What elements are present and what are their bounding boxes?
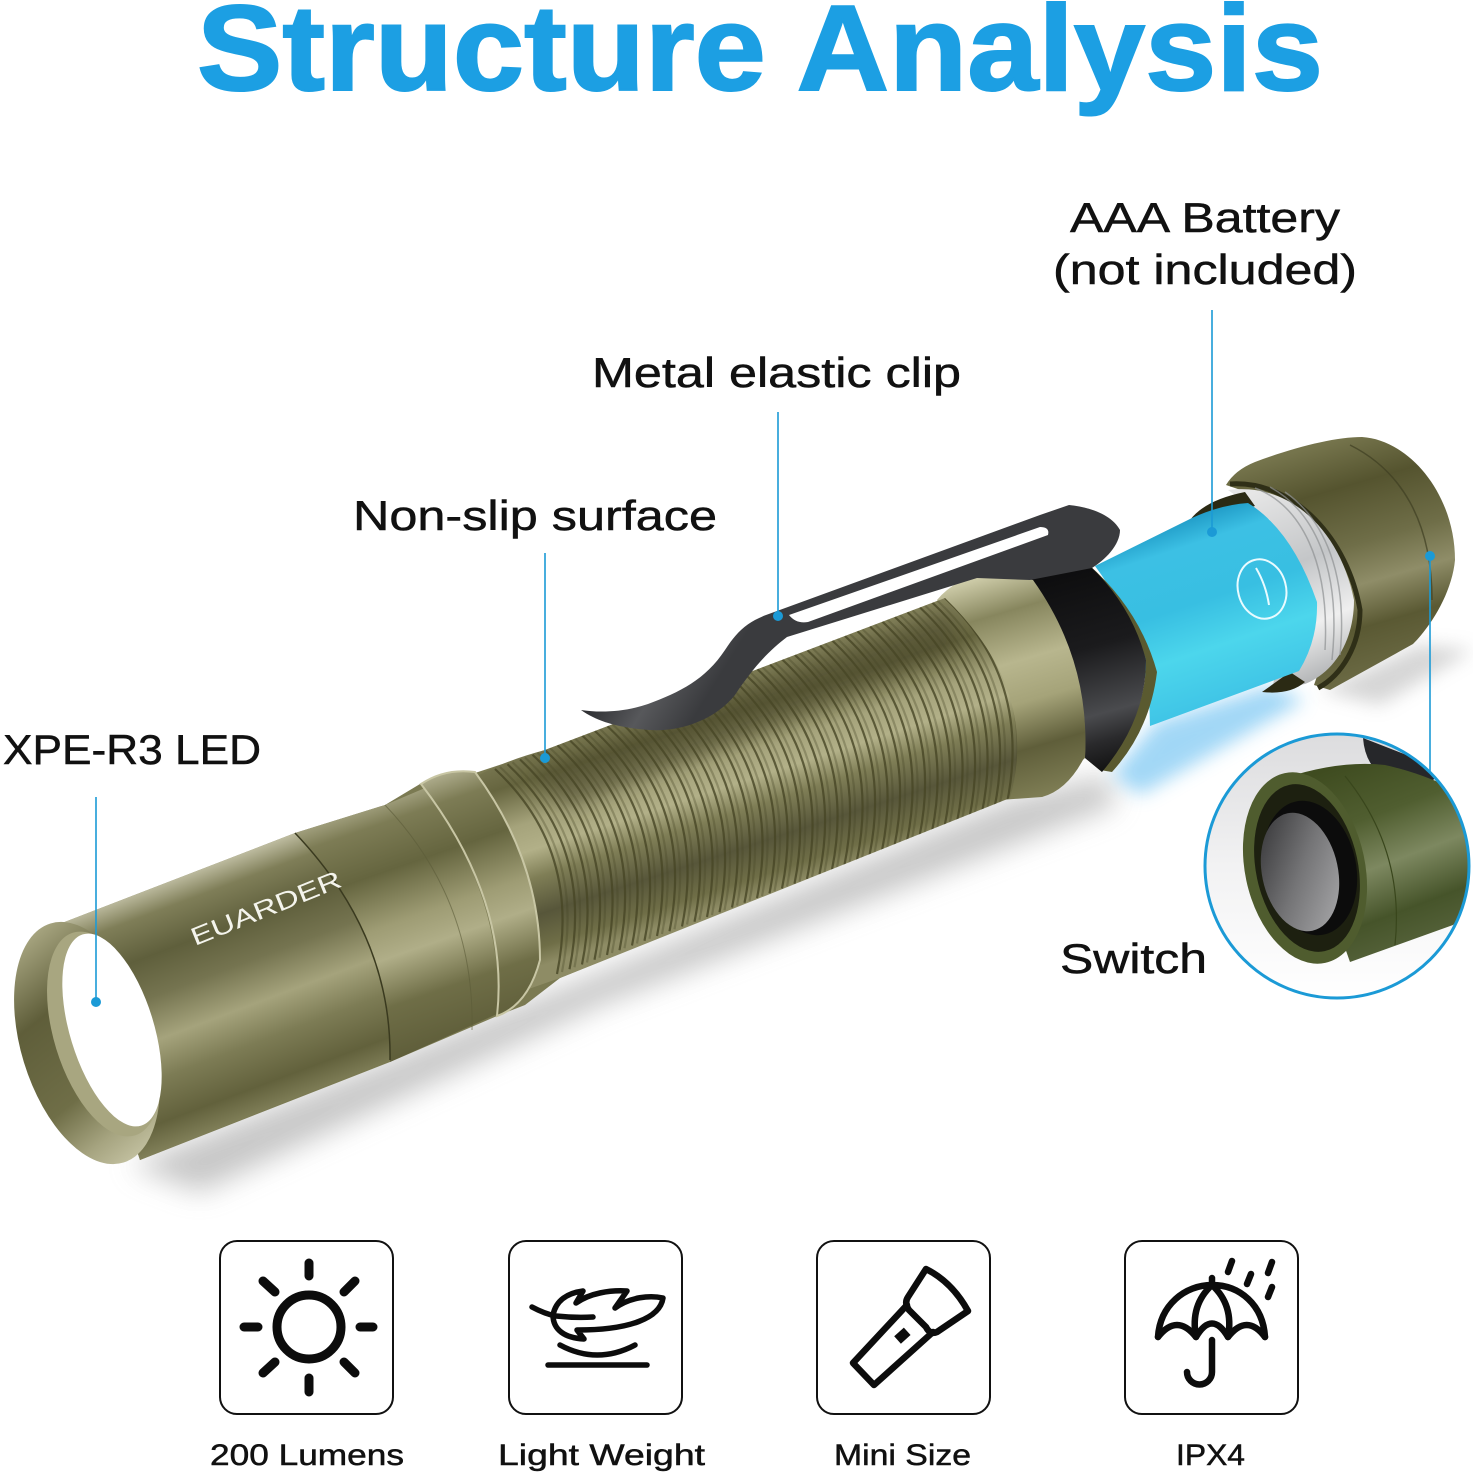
label: switch: Switch: [1060, 935, 1207, 982]
feature: mini size: [817, 1241, 990, 1472]
brand logo: EUARDER: [187, 866, 346, 952]
non-slip ribbed grip: [470, 596, 1018, 992]
callout: AAA battery: (not included): [1053, 246, 1357, 293]
tail cap: [1226, 437, 1455, 690]
battery cavity: [1190, 492, 1305, 693]
inset button: [1267, 800, 1357, 936]
AAA battery: [1095, 503, 1317, 726]
callout: switch leader: [1425, 551, 1435, 778]
inset: switch close-up: [1205, 734, 1473, 998]
black ring: [1030, 564, 1157, 772]
callout: AAA battery: AAA Battery: [1070, 194, 1340, 241]
feature: light weight: Light Weight: [498, 1439, 706, 1472]
callout: metal elastic clip: [592, 349, 961, 621]
callout: non-slip surface: [353, 492, 717, 763]
flashlight silhouette: [62, 566, 1146, 1160]
feature: IPX4: IPX4: [1176, 1439, 1245, 1472]
feature: IPX4: [1125, 1241, 1298, 1472]
feature: light weight: [498, 1241, 706, 1472]
mid barrel: [295, 788, 498, 1062]
icon: flashlight: [853, 1269, 968, 1385]
icon: umbrella with rain: [1158, 1261, 1272, 1384]
feature: mini size: Mini Size: [834, 1439, 971, 1472]
flashlight illustration: [0, 437, 1473, 1192]
icon: feather: [532, 1291, 663, 1365]
bezel rim and lens: [0, 904, 187, 1182]
callout: metal elastic clip: Metal elastic clip: [592, 349, 961, 396]
metal elastic clip: [581, 505, 1120, 730]
icon: sun: [244, 1263, 373, 1392]
feature: 200 lumens: 200 Lumens: [210, 1439, 404, 1472]
callout: XPE-R3 LED: XPE-R3 LED: [3, 726, 261, 773]
inset clip piece: [1363, 738, 1434, 780]
head barrel: [62, 805, 472, 1160]
silver thread: [1228, 487, 1354, 690]
inset front face: [1242, 772, 1367, 964]
inset cap body: [1300, 764, 1468, 962]
callout: AAA battery: [1053, 194, 1357, 537]
callout: non-slip surface: Non-slip surface: [353, 492, 717, 539]
collar: [937, 572, 1085, 800]
flange ring: [421, 771, 540, 1016]
callout: XPE-R3 LED: [3, 726, 261, 1007]
ground shadow: [130, 645, 1473, 1192]
feature: 200 lumens: [210, 1241, 404, 1472]
